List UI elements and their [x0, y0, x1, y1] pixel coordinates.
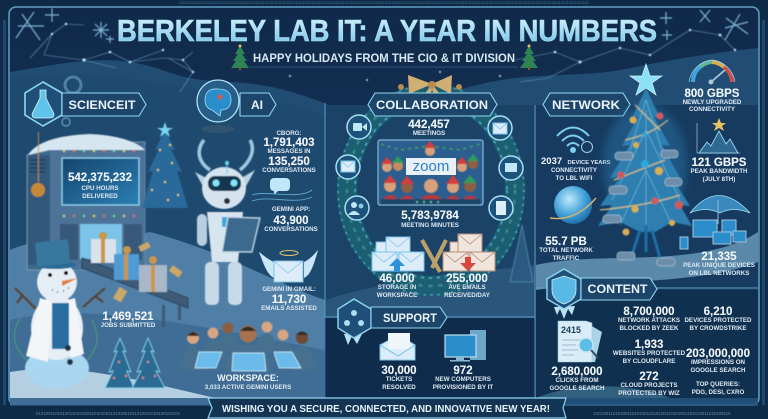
binary border: 0101001101010100110101001101010011010100110101001101010011010100110101001101010011010100110101001101010011010100110101001101010011010100110101001101010011010100110101001101010011010100110101001101010011010100 [179, 1, 589, 5]
stat: meeting minutes: MEETING MINUTES [401, 222, 459, 229]
icon: video button [347, 115, 371, 139]
icon: wreath [338, 85, 524, 295]
stat: peak bandwidth: 121 GBPS [692, 157, 747, 169]
stat: peak bandwidth: PEAK BANDWIDTH [690, 168, 748, 175]
stat: upgraded connectivity [683, 88, 742, 113]
icon: snowman [14, 239, 105, 388]
stat: jobs submitted [101, 311, 156, 329]
stat: storage: WORKSPACE [377, 292, 417, 299]
icon: Christmas tree [142, 122, 188, 208]
stat: storage: STORAGE IN [378, 284, 417, 291]
icon: document with magnifier: 2415 [561, 325, 581, 335]
panel: Support [338, 299, 493, 391]
stat: wifi device years [541, 156, 611, 182]
stat: wifi device years: 2037 [541, 156, 562, 167]
icon: shield hexagon [547, 269, 581, 319]
stat: CBorg: 1,791,403 [263, 137, 315, 149]
heading: AI: AI [251, 98, 263, 112]
stat: top queries [692, 381, 744, 396]
heading: AI [240, 93, 276, 116]
icon: Zoom screen: zoom [413, 158, 449, 175]
stat: impressions: GOOGLE SEARCH [690, 367, 746, 374]
stat: Workspace: 3,033 ACTIVE GEMINI USERS [205, 384, 291, 391]
stat: cloud projects: 272 [639, 371, 659, 383]
heading: ScienceIT: SCIENCEIT [68, 98, 136, 112]
stat: wifi device years: TO LBL WIFI [556, 175, 593, 182]
stat: network attacks [618, 306, 680, 332]
stat: clicks: 2,680,000 [551, 366, 603, 378]
panel: Content [547, 269, 752, 397]
icon: download envelopes [443, 234, 495, 271]
icon: conveyor belt with gifts [82, 232, 188, 327]
stat: Cloudflare: WEBSITES PROTECTED [613, 350, 686, 357]
icon: Zoom screen [378, 140, 483, 205]
stat: clicks: GOOGLE SEARCH [549, 385, 605, 392]
stat: Gemini app: 43,900 [273, 215, 309, 227]
icon: chat button [499, 156, 523, 180]
stat: new computers: PROVISIONED BY IT [433, 384, 493, 391]
stat: meeting minutes [401, 210, 459, 229]
stat: total traffic: 55.7 PB [545, 236, 587, 248]
icon: robot reindeer [195, 140, 260, 305]
stat: emails: AVE EMAILS [448, 284, 486, 291]
stat: clicks [549, 366, 605, 392]
stat: CrowdStrike [684, 306, 752, 332]
heading: Support [371, 307, 447, 328]
stat: CrowdStrike: 6,210 [704, 306, 732, 318]
icon: computer [445, 330, 486, 362]
stat: Gemini in Gmail [261, 286, 317, 312]
icon: wifi [557, 128, 592, 153]
icon: chat bubble [252, 178, 312, 201]
stat: Workspace: WORKSPACE: [217, 373, 279, 383]
icon: document button [489, 196, 513, 220]
stat: total traffic [539, 236, 593, 262]
stat: Gemini in Gmail: 11,730 [272, 294, 306, 306]
title: BERKELEY LAB IT: A YEAR IN NUMBERS [117, 13, 657, 48]
stat: meetings [408, 119, 450, 137]
stat: CrowdStrike: DEVICES PROTECTED [684, 317, 752, 324]
heading: ScienceIT [62, 93, 146, 116]
stat: network attacks: 8,700,000 [623, 306, 675, 318]
stat: tickets [381, 365, 417, 391]
subtitle: HAPPY HOLIDAYS FROM THE CIO & IT DIVISION [253, 53, 515, 65]
stat: CBorg: 135,250 [268, 156, 310, 168]
heading: Content: CONTENT [588, 282, 648, 296]
stat: CBorg: MESSAGES IN [268, 148, 311, 155]
stat: jobs submitted: JOBS SUBMITTED [101, 322, 156, 329]
stat: upgraded connectivity: CONNECTIVITY [689, 106, 736, 113]
stat: meetings: MEETINGS [413, 130, 445, 137]
stat: impressions: IMPRESSIONS ON [691, 359, 746, 366]
stat: storage: 46,000 [379, 273, 415, 285]
heading: Support: SUPPORT [383, 311, 438, 325]
panel: Collaboration [336, 75, 533, 299]
stat: Cloudflare: BY CLOUDFLARE [623, 358, 675, 365]
stat: wifi device years: DEVICE YEARS [567, 160, 611, 166]
icon: right small tree [520, 44, 538, 70]
stat: jobs submitted: 1,469,521 [102, 311, 154, 323]
stat: CBorg: CBORG: [276, 130, 302, 137]
icon: network Christmas tree [598, 64, 692, 266]
heading: Collaboration [368, 93, 497, 116]
stat: Gemini in Gmail: EMAILS ASSISTED [261, 305, 317, 312]
stat: Workspace [205, 373, 291, 391]
constellations and snowflakes [16, 8, 748, 92]
icon: winged envelope [259, 250, 318, 282]
stat: emails: RECEIVED/DAY [444, 292, 491, 299]
stat: peak devices: 21,335 [701, 251, 737, 263]
stat: Cloudflare: 1,933 [635, 339, 663, 351]
icon: contacts button [345, 196, 369, 220]
heading: Content [581, 278, 657, 300]
icon: flask hexagon badge [25, 77, 81, 126]
stat: CrowdStrike: BY CROWDSTRIKE [690, 325, 746, 332]
binary border: 010100110101001101010011010100110101001101010011010100110101 [36, 411, 181, 416]
icon: team with laptops [180, 322, 316, 371]
icon: mail button right [488, 116, 512, 140]
stat: new computers: 972 [453, 365, 473, 377]
icon: gold ribbon [422, 240, 446, 272]
icon: speed gauge [689, 60, 735, 84]
panel: AI [180, 80, 318, 391]
stat: emails [444, 273, 491, 299]
stat: Gemini app: GEMINI APP: [272, 206, 310, 213]
icon: server machine [27, 132, 145, 270]
stat: meeting minutes: 5,783,9784 [401, 210, 459, 222]
stat: storage [377, 273, 417, 299]
icon: gold bow [398, 75, 462, 100]
stat: peak devices: ON LBL NETWORKS [689, 270, 749, 277]
icon: left small tree [231, 44, 249, 70]
section dividers [325, 103, 758, 398]
panel: ScienceIT [14, 77, 188, 388]
stat: network attacks: NETWORK ATTACKS [618, 317, 680, 324]
stat: Gemini in Gmail: GEMINI IN GMAIL: [262, 286, 316, 293]
stat: CBorg: CONVERSATIONS [262, 167, 316, 174]
stat: top queries: PDG, DESI, CXRO [692, 389, 744, 396]
stat: peak devices: PEAK UNIQUE DEVICES [683, 262, 755, 269]
icon: ticket envelope [380, 333, 415, 360]
stat: cloud projects: PROTECTED BY WIZ [618, 390, 680, 397]
stat: CPU hours: 542,375,232 [68, 172, 132, 184]
stat: peak devices [683, 251, 755, 277]
stat: peak bandwidth: (JULY 8TH) [703, 176, 735, 183]
stat: Gemini app: CONVERSATIONS [264, 226, 318, 233]
stat: new computers [433, 365, 493, 391]
icon: brain snow globe [197, 80, 239, 133]
icon: umbrella with devices [680, 196, 750, 249]
stat: upgraded connectivity: NEWLY UPGRADED [683, 99, 742, 106]
stat: wifi device years: CONNECTIVITY [551, 167, 598, 174]
icon: side pine tree [510, 225, 533, 282]
icon: globe [550, 186, 596, 224]
heading: Collaboration: COLLABORATION [376, 98, 488, 112]
panel: Network [539, 60, 755, 277]
stat: total traffic: TOTAL NETWORK [539, 247, 593, 254]
footer banner: WISHING YOU A SECURE, CONNECTED, AND INNOVATIVE NEW YEAR! [222, 403, 550, 415]
stat: meetings: 442,457 [408, 119, 450, 131]
stat: CPU hours: DELIVERED [82, 193, 118, 200]
heading: Network [543, 93, 630, 116]
icon: peak chart [697, 118, 740, 153]
icon: small trees [105, 338, 165, 388]
stat: new computers: NEW COMPUTERS [435, 376, 491, 383]
stat: top queries: TOP QUERIES: [696, 381, 740, 388]
stat: CBorg [262, 130, 316, 174]
heading: Network: NETWORK [552, 98, 620, 112]
stat: Gemini app [264, 206, 318, 233]
stat: cloud projects: CLOUD PROJECTS [620, 382, 678, 389]
stat: tickets: RESOLVED [382, 384, 416, 391]
footer banner [208, 398, 566, 418]
icon: people hexagon [338, 299, 371, 345]
stat: upgraded connectivity: 800 GBPS [685, 88, 740, 100]
stat: CPU hours: CPU HOURS [81, 185, 119, 192]
icon: upload envelopes [372, 237, 424, 272]
stat: tickets: TICKETS [386, 376, 412, 383]
stat: CPU hours [68, 172, 132, 200]
stat: clicks: CLICKS FROM [556, 377, 598, 384]
stat: impressions: 203,000,000 [686, 348, 750, 360]
binary border: 010100110101001101010011010100110101001101010011010100110 [594, 411, 731, 416]
stat: tickets: 30,000 [381, 365, 417, 377]
stat: network attacks: BLOCKED BY ZEEK [619, 325, 679, 332]
stat: emails: 255,000 [446, 273, 488, 285]
stat: Cloudflare [613, 339, 686, 365]
icon: mail button left [336, 155, 360, 179]
stat: total traffic: TRAFFIC [553, 255, 580, 262]
stat: cloud projects [618, 371, 680, 397]
stat: impressions [686, 348, 750, 374]
icon: document with magnifier [558, 321, 602, 362]
stat: peak bandwidth [690, 157, 748, 183]
